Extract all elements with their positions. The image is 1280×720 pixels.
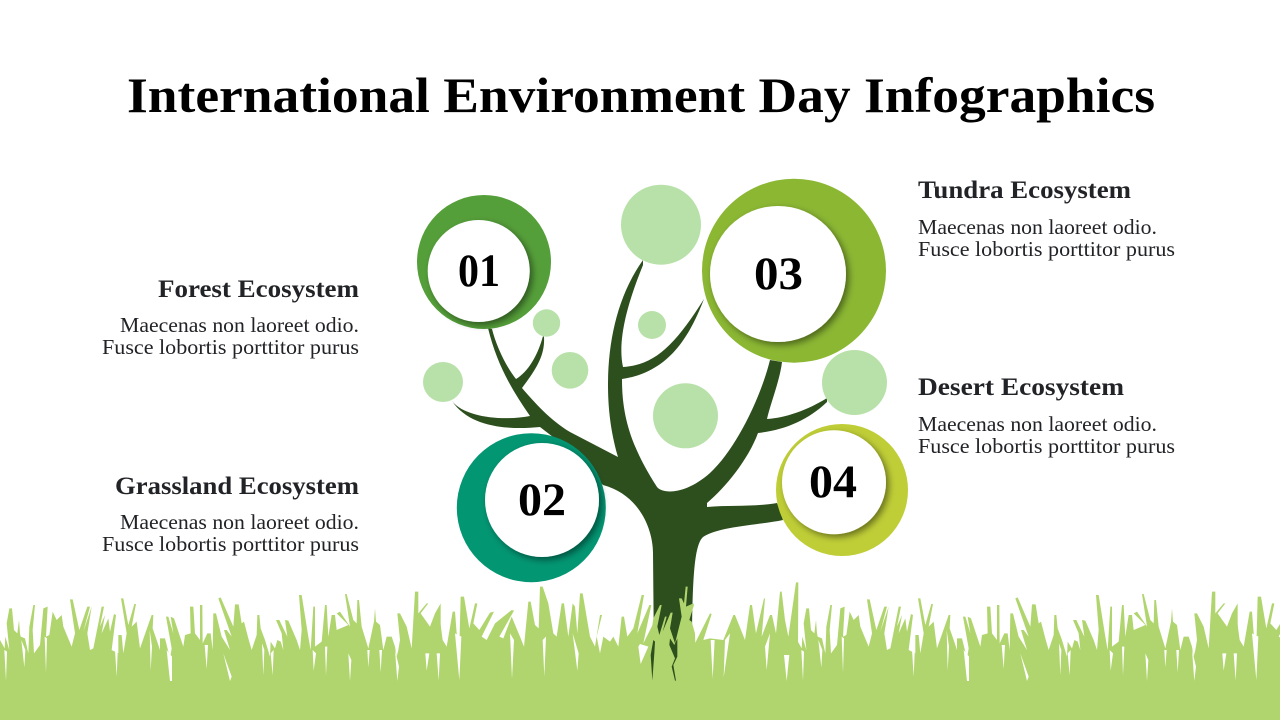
node 03: 03 <box>754 248 803 300</box>
text block: Forest Ecosystem: Fusce lobortis porttitor purus <box>102 335 359 359</box>
text block: Grassland Ecosystem <box>102 473 359 556</box>
text block: Tundra Ecosystem <box>918 177 1175 261</box>
node 04: 04 <box>809 456 857 508</box>
text block: Desert Ecosystem: Maecenas non laoreet odio. <box>918 412 1157 436</box>
text block: Tundra Ecosystem: Maecenas non laoreet odio. <box>918 215 1157 239</box>
text block: Grassland Ecosystem: Fusce lobortis porttitor purus <box>102 532 359 556</box>
title: International Environment Day Infographics <box>127 67 1155 123</box>
tree <box>452 260 827 681</box>
node 03 <box>702 179 886 363</box>
text block: Desert Ecosystem: Fusce lobortis porttitor purus <box>918 434 1175 458</box>
tree roots <box>651 638 677 681</box>
grass blades over trunk <box>649 587 696 667</box>
grass field <box>0 582 1280 720</box>
text block: Desert Ecosystem <box>918 374 1175 458</box>
text block: Grassland Ecosystem: Maecenas non laoreet odio. <box>120 510 359 534</box>
text block: Tundra Ecosystem: Fusce lobortis porttitor purus <box>918 237 1175 261</box>
node 02: 02 <box>518 474 566 526</box>
node 02 <box>457 433 606 582</box>
text block: Forest Ecosystem <box>102 276 359 359</box>
tree trunk and branches <box>452 260 827 660</box>
node 01: 01 <box>458 245 500 297</box>
text block: Forest Ecosystem: Maecenas non laoreet odio. <box>120 313 359 337</box>
text block: Grassland Ecosystem: Grassland Ecosystem <box>115 473 359 500</box>
decorative leaf circles <box>423 185 887 448</box>
node 01 <box>417 195 551 329</box>
text block: Forest Ecosystem: Forest Ecosystem <box>158 276 359 303</box>
text block: Tundra Ecosystem: Tundra Ecosystem <box>918 177 1131 204</box>
node 04 <box>776 424 908 556</box>
text block: Desert Ecosystem: Desert Ecosystem <box>918 374 1124 401</box>
